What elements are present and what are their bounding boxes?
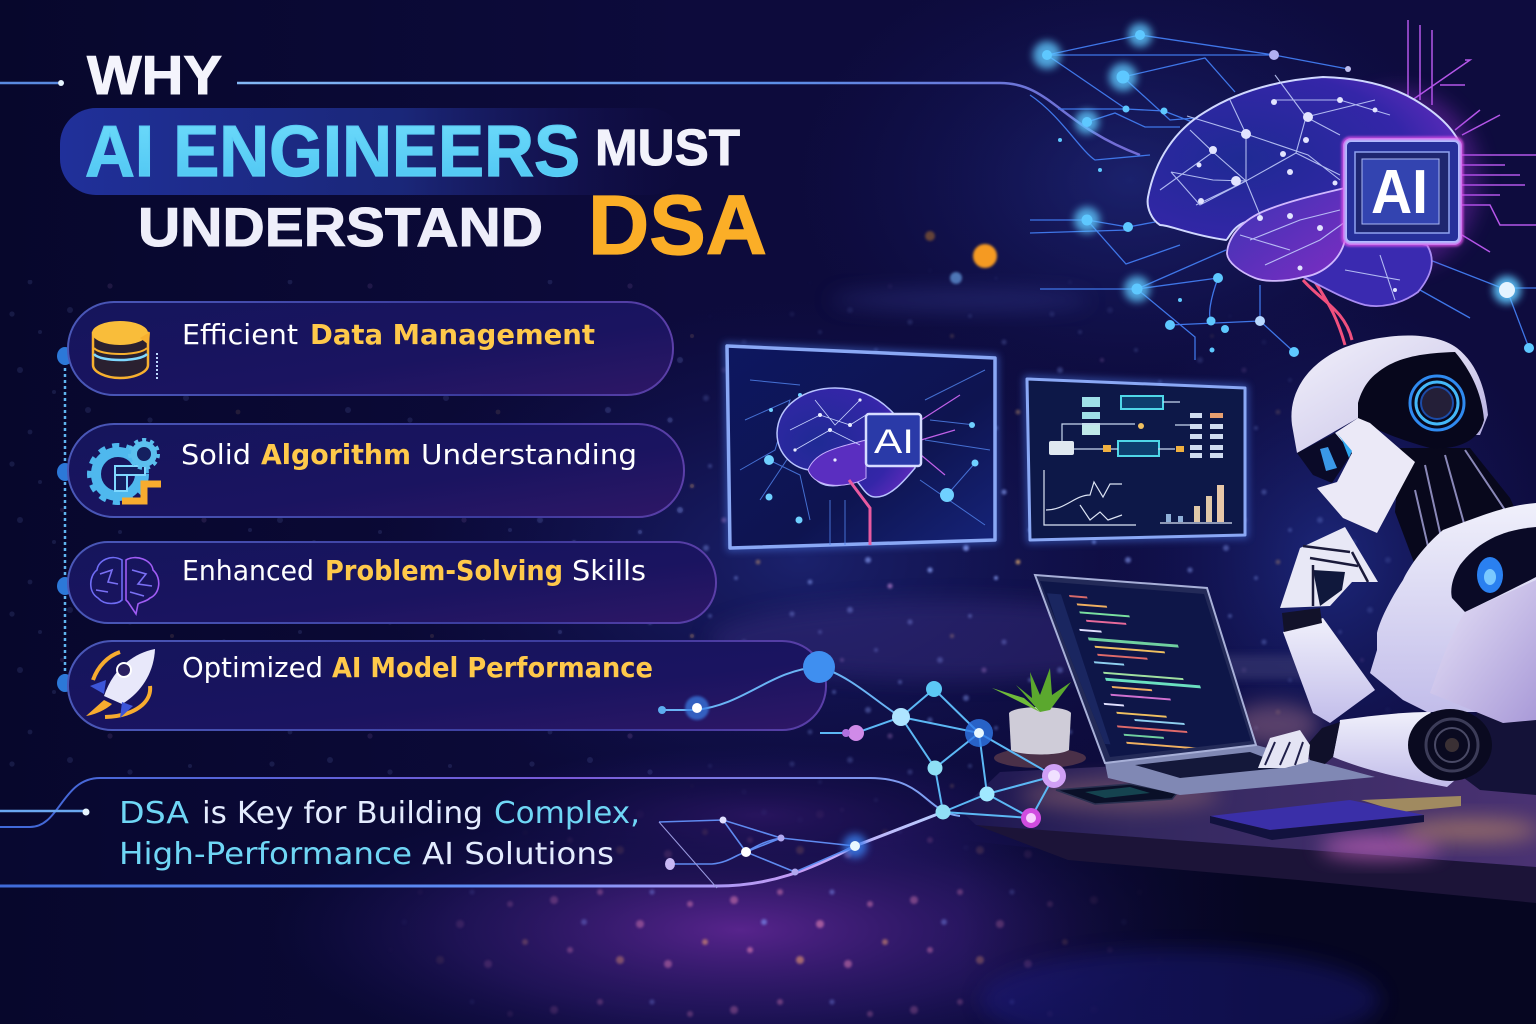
title words: AI engineers: AI ENGINEERS — [85, 112, 580, 192]
title line — [0, 80, 1140, 155]
text: closing statement: is Key for Building — [202, 796, 483, 831]
code lines — [1047, 593, 1201, 748]
AI chip — [866, 414, 921, 466]
temporal lobe — [1227, 188, 1345, 281]
floating screen: flowchart and charts — [1027, 379, 1245, 540]
title word: why: WHY — [87, 44, 222, 106]
panel: optimized AI model performance — [68, 641, 826, 730]
circuit traces — [1405, 20, 1536, 252]
robot chest core — [1451, 527, 1536, 612]
robot visor — [1297, 433, 1352, 483]
plant — [992, 668, 1086, 768]
icon: AI brain — [1148, 20, 1536, 345]
label: enhanced problem-solving skills: Enhanced — [182, 554, 314, 587]
bar chart — [1160, 485, 1232, 523]
robot neck — [1395, 448, 1520, 605]
robot torso — [1370, 503, 1536, 712]
label: efficient data management: Efficient — [182, 318, 298, 351]
tablet on desk — [1210, 796, 1461, 840]
label: enhanced problem-solving skills: Problem-Solving — [325, 554, 563, 587]
label: efficient data management: Data Management — [310, 318, 595, 351]
robot upper arm — [1283, 618, 1375, 723]
title word: understand: UNDERSTAND — [138, 196, 543, 258]
lower left graph — [659, 816, 867, 888]
robot face — [1317, 418, 1415, 533]
label: solid algorithm understanding — [181, 438, 637, 471]
panel: closing statement — [0, 778, 960, 886]
neural web — [1160, 75, 1400, 300]
icon: rocket — [86, 649, 155, 718]
AI chip: AI — [1371, 158, 1428, 227]
title word: must: MUST — [595, 119, 740, 176]
robot forearm and elbow — [1258, 709, 1492, 787]
label: optimized AI model performance — [182, 651, 653, 684]
label: optimized AI model performance: AI Model Performance — [332, 651, 653, 684]
laptop — [1035, 575, 1375, 795]
icon: brain — [91, 558, 159, 614]
network nodes — [658, 651, 1066, 828]
AI chip — [1343, 138, 1462, 245]
panel: solid algorithm understanding — [68, 424, 684, 517]
text: closing statement — [119, 796, 640, 872]
network: upper right circuit lines — [1030, 35, 1536, 360]
label: optimized AI model performance: Optimized — [182, 651, 323, 684]
label: solid algorithm understanding: Algorithm — [261, 438, 411, 471]
robot hand at chin — [1280, 527, 1378, 632]
label: enhanced problem-solving skills: Skills — [572, 554, 646, 587]
panel: enhanced problem-solving skills — [68, 542, 716, 623]
phone — [1056, 784, 1177, 804]
timeline connector — [57, 347, 73, 692]
icon: gears and flow — [90, 440, 161, 502]
flowchart — [1049, 396, 1223, 458]
floating screen: AI brain — [727, 346, 995, 548]
AI chip: AI — [874, 423, 914, 461]
brain illustration — [777, 388, 960, 545]
network: lower connector — [658, 651, 1066, 888]
title word: DSA: DSA — [588, 178, 767, 272]
text: closing statement: Complex, — [494, 796, 640, 831]
title — [60, 44, 767, 272]
panel: efficient data management — [68, 302, 673, 395]
icon: database — [92, 321, 157, 380]
cerebrum — [1148, 77, 1458, 240]
cerebellum — [1303, 230, 1432, 306]
label: solid algorithm understanding: Solid — [181, 438, 251, 471]
label: solid algorithm understanding: Understanding — [421, 438, 637, 471]
desk — [960, 745, 1536, 1024]
text: closing statement: DSA — [119, 796, 190, 831]
text: closing statement: High-Performance — [119, 837, 412, 872]
label: efficient data management — [182, 318, 595, 351]
robot — [1258, 335, 1536, 795]
text: closing statement: AI Solutions — [422, 837, 614, 872]
brain stem — [1303, 280, 1352, 345]
line chart — [1044, 470, 1136, 525]
label: enhanced problem-solving skills — [182, 554, 646, 587]
title pill — [60, 108, 685, 195]
robot shoulder plate — [1430, 580, 1536, 723]
robot head — [1291, 335, 1488, 533]
robot ear sensor — [1410, 376, 1464, 430]
robot body shadow — [1440, 640, 1536, 795]
network: upper right nodes — [1033, 23, 1534, 357]
